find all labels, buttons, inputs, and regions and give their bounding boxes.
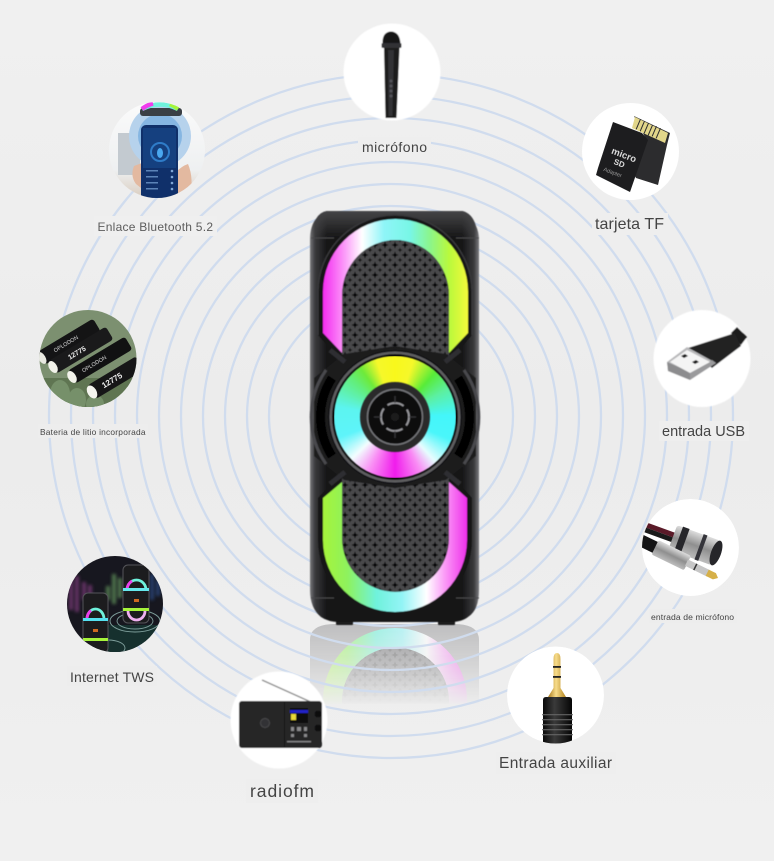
concentric sound wave rings [49, 74, 733, 758]
icon: phone with Bluetooth app [115, 102, 205, 198]
speaker cabinet [310, 211, 479, 622]
label: Entrada auxiliar: Entrada auxiliar [499, 755, 612, 772]
label: Internet TWS: Internet TWS [70, 669, 154, 685]
icon: lithium batteries [40, 310, 136, 407]
icon: lithium batteries: OPLODON [53, 335, 80, 354]
XLR connector [644, 523, 722, 566]
label: entrada de micrófono: entrada de micrófono [651, 612, 734, 622]
icon: 3.5mm aux plug [507, 646, 604, 745]
icon: microSD card and adapter: Adapter [602, 167, 623, 179]
icon: FM radio [230, 672, 328, 768]
bottom RGB light arch [323, 482, 467, 612]
label: radiofm: radiofm [250, 781, 314, 801]
icon: XLR and jack connectors [642, 499, 739, 596]
top arch housing [318, 215, 472, 362]
feature: Bluetooth [94, 100, 217, 236]
label: entrada USB: entrada USB [662, 424, 745, 440]
feature: aux input [500, 646, 612, 768]
speaker feet [336, 618, 455, 625]
centre driver housing [314, 346, 476, 488]
feature: TWS [65, 554, 165, 686]
label: tarjeta TF: tarjeta TF [595, 216, 664, 233]
feature: TF card [582, 103, 679, 235]
feature: microphone input [642, 499, 739, 623]
label: micrófono: micrófono [362, 139, 427, 155]
icon: two TWS speakers [65, 554, 165, 656]
centre tweeter [360, 382, 430, 452]
jack connector [642, 535, 718, 580]
feature: microphone [344, 24, 440, 156]
icon: microSD card and adapter: micro [610, 146, 638, 165]
icon: lithium batteries: 12775 [100, 371, 124, 390]
bottom speaker grill [342, 462, 449, 592]
speaker reflection [310, 624, 479, 701]
feature: USB input [654, 310, 750, 441]
speaker [310, 211, 479, 625]
label: Batería de litio incorporada: Bateria de litio incorporada [40, 427, 146, 437]
bottom arch housing [318, 472, 472, 617]
icon: microphone [344, 24, 440, 120]
icon: microSD card and adapter: SD [612, 157, 626, 170]
left speaker [83, 593, 108, 653]
top speaker grill [342, 240, 449, 372]
feature: lithium battery [35, 308, 148, 438]
icon: lithium batteries: OPLODON [81, 355, 108, 374]
centre RGB light ring [334, 356, 456, 478]
icon: lithium batteries: 12775 [67, 346, 88, 362]
right speaker [123, 565, 149, 623]
feature: FM radio [230, 672, 328, 803]
top RGB light arch [323, 219, 468, 353]
icon: microSD card and adapter [582, 103, 679, 200]
label: Enlace Bluetooth 5.2: Enlace Bluetooth 5.2 [98, 220, 213, 234]
icon: USB plug [654, 310, 750, 407]
